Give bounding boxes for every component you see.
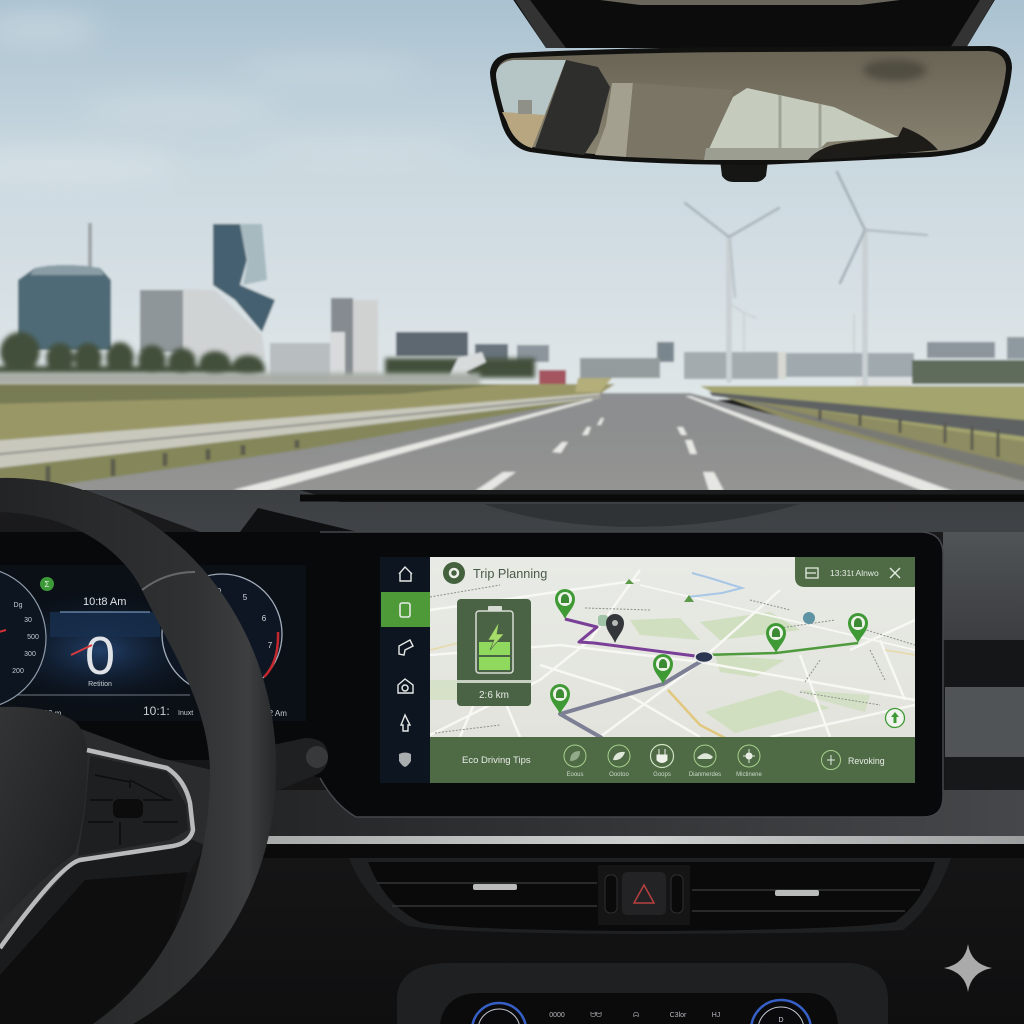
- clock: 10:t8 Am: [83, 596, 126, 608]
- bottom status text: 1 2 Am: [262, 709, 287, 718]
- tip icon 5: Mictinene: [736, 772, 762, 778]
- landscape through windshield: [0, 0, 1024, 510]
- status icon: [40, 577, 54, 591]
- dashboard body: [0, 490, 1024, 1024]
- tip icon 4: [689, 745, 721, 778]
- pin: [550, 684, 570, 714]
- climate buttons: ᗢᗢ: [590, 1011, 602, 1019]
- map river: [688, 573, 742, 597]
- wheel buttons: [78, 756, 188, 856]
- climate buttons: [549, 1011, 720, 1019]
- mirror stem: [720, 160, 768, 182]
- hazard switch block: [598, 865, 690, 925]
- tip icon 2: Oootoo: [609, 772, 630, 778]
- headliner mount: [512, 0, 996, 48]
- climate dial right: D: [778, 1017, 784, 1024]
- skyline right: [539, 337, 1024, 392]
- tip icon 3: Goops: [653, 772, 671, 778]
- dark location pin: [606, 614, 624, 643]
- map panel: [430, 557, 915, 738]
- dash top shadow: [484, 504, 800, 527]
- sky: [0, 0, 1024, 400]
- mirror reflection seat: [808, 127, 938, 160]
- remaining control: [822, 750, 885, 770]
- wheel spoke upper: [0, 725, 212, 955]
- mirror reflection left window: [496, 60, 566, 148]
- pin: [766, 623, 786, 653]
- wheel hub: [0, 707, 88, 923]
- needle: [71, 645, 92, 655]
- chrome spoke trim: [0, 750, 193, 948]
- status icon: Σ: [45, 580, 50, 589]
- climate dial right: [751, 1000, 811, 1024]
- climate dial left: [472, 1003, 526, 1024]
- bottom status text: 10:1:: [143, 704, 170, 718]
- bezel edge highlight: [320, 532, 943, 817]
- shadow below chrome: [262, 844, 1024, 858]
- icon: shield: [399, 752, 411, 767]
- wind turbines: [685, 172, 927, 403]
- dash shadow wedge: [240, 508, 358, 532]
- right gauge: 6: [262, 614, 267, 623]
- mirror pale strip: [595, 83, 633, 157]
- wheel rim: [0, 478, 276, 1024]
- road: [0, 393, 1024, 510]
- title: Trip Planning: [473, 567, 547, 581]
- guardrail left: [0, 393, 600, 483]
- bottom status text: [45, 706, 286, 716]
- sidebar menu: [380, 557, 430, 783]
- right gauge: 7: [268, 641, 273, 650]
- clouds: [0, 14, 470, 181]
- icon: figure: [401, 715, 410, 731]
- tips heading: Eco Driving Tips: [462, 755, 531, 766]
- turn stalk: [268, 738, 328, 793]
- range text: 2:6 km: [479, 690, 509, 701]
- mirror pillar: [535, 60, 610, 155]
- icon: home: [399, 567, 412, 581]
- vent tab: [473, 884, 517, 890]
- title logo: [443, 562, 465, 584]
- right dash panels: [943, 532, 1024, 790]
- pin: [653, 654, 673, 684]
- tip icon 2: [608, 745, 630, 778]
- pin: [555, 589, 575, 619]
- route: purple segment: [565, 619, 703, 657]
- route hub: [695, 652, 713, 662]
- left gauge: 30: [24, 617, 32, 624]
- speed caption: Retition: [88, 681, 112, 688]
- right gauge: 0: [217, 587, 222, 596]
- left gauge: 300: [24, 651, 36, 658]
- chrome strip: [265, 836, 1024, 844]
- tip icon 1: [564, 745, 586, 778]
- mirror reflection smudge: [863, 59, 927, 81]
- map parks: [430, 612, 870, 733]
- display bezel: [0, 532, 943, 817]
- treeline left: [0, 332, 535, 378]
- remaining control: Revoking: [848, 756, 885, 766]
- instrument cluster: [0, 565, 306, 721]
- bottom status text: 8:20 m: [37, 709, 62, 718]
- left gauge: 500: [27, 634, 39, 641]
- right gauge: 8: [255, 667, 260, 676]
- lower trim strip: [262, 790, 1024, 836]
- ground clutter band: [0, 373, 480, 385]
- city skyline left: [18, 223, 674, 378]
- climate buttons: ᗣ: [633, 1011, 639, 1019]
- tip icon 1: Eoous: [566, 772, 584, 778]
- icon: house: [398, 679, 413, 693]
- air vents: [349, 858, 951, 934]
- steering wheel: [0, 478, 276, 1024]
- icon: document: [400, 603, 410, 617]
- left gauge: [0, 567, 46, 709]
- right gauge: [162, 574, 282, 694]
- vent tab: [775, 890, 819, 896]
- left gauge: 200: [12, 668, 24, 675]
- mirror reflection right window: [704, 88, 898, 160]
- dash top surface: [85, 490, 1024, 640]
- sparkle watermark: [944, 944, 992, 992]
- tip icon 4: Dianmerdes: [689, 772, 721, 778]
- mirror glass: [496, 51, 1006, 160]
- rim seam: [142, 572, 195, 590]
- battery card: [457, 599, 531, 706]
- fields: [0, 384, 615, 446]
- pin: [848, 613, 868, 643]
- map roads: [430, 570, 915, 737]
- speed readout: 0: [85, 626, 115, 686]
- mirror frame: [490, 46, 1012, 165]
- top status panel: 13:31t Alnwo: [830, 568, 879, 578]
- map poi markers: [625, 579, 694, 602]
- map road labels: [430, 585, 915, 733]
- battery icon: [476, 606, 513, 673]
- climate buttons: 0000: [549, 1012, 565, 1019]
- left gauge: Dg: [14, 602, 23, 609]
- windshield base line: [300, 494, 1024, 502]
- top status panel: [795, 557, 915, 587]
- climate console: [397, 963, 888, 1024]
- icon: car: [399, 640, 413, 655]
- road markings: [233, 396, 955, 492]
- rear-view mirror assembly: [490, 0, 1012, 182]
- climate buttons: C3lor: [670, 1012, 687, 1019]
- climate buttons: HJ: [712, 1012, 720, 1019]
- lower wheel void: [0, 860, 190, 1024]
- guardrail right: [709, 392, 1024, 484]
- verge left: [0, 398, 600, 495]
- cluster glow: [34, 606, 174, 694]
- mirror centre panel: [626, 83, 733, 160]
- route: green segment: [703, 643, 858, 655]
- route: grey segment: [560, 660, 703, 738]
- right gauge: 5: [243, 593, 248, 602]
- wheel spoke lower band: [0, 840, 205, 975]
- eco driving tips bar: [430, 737, 915, 783]
- map locate button: [886, 708, 904, 728]
- active menu item: [381, 592, 430, 627]
- tip icon 5: [736, 745, 762, 778]
- tip icon 3: [650, 744, 674, 778]
- white curved building: [445, 352, 486, 385]
- bottom status text: Inuxt: [178, 710, 193, 717]
